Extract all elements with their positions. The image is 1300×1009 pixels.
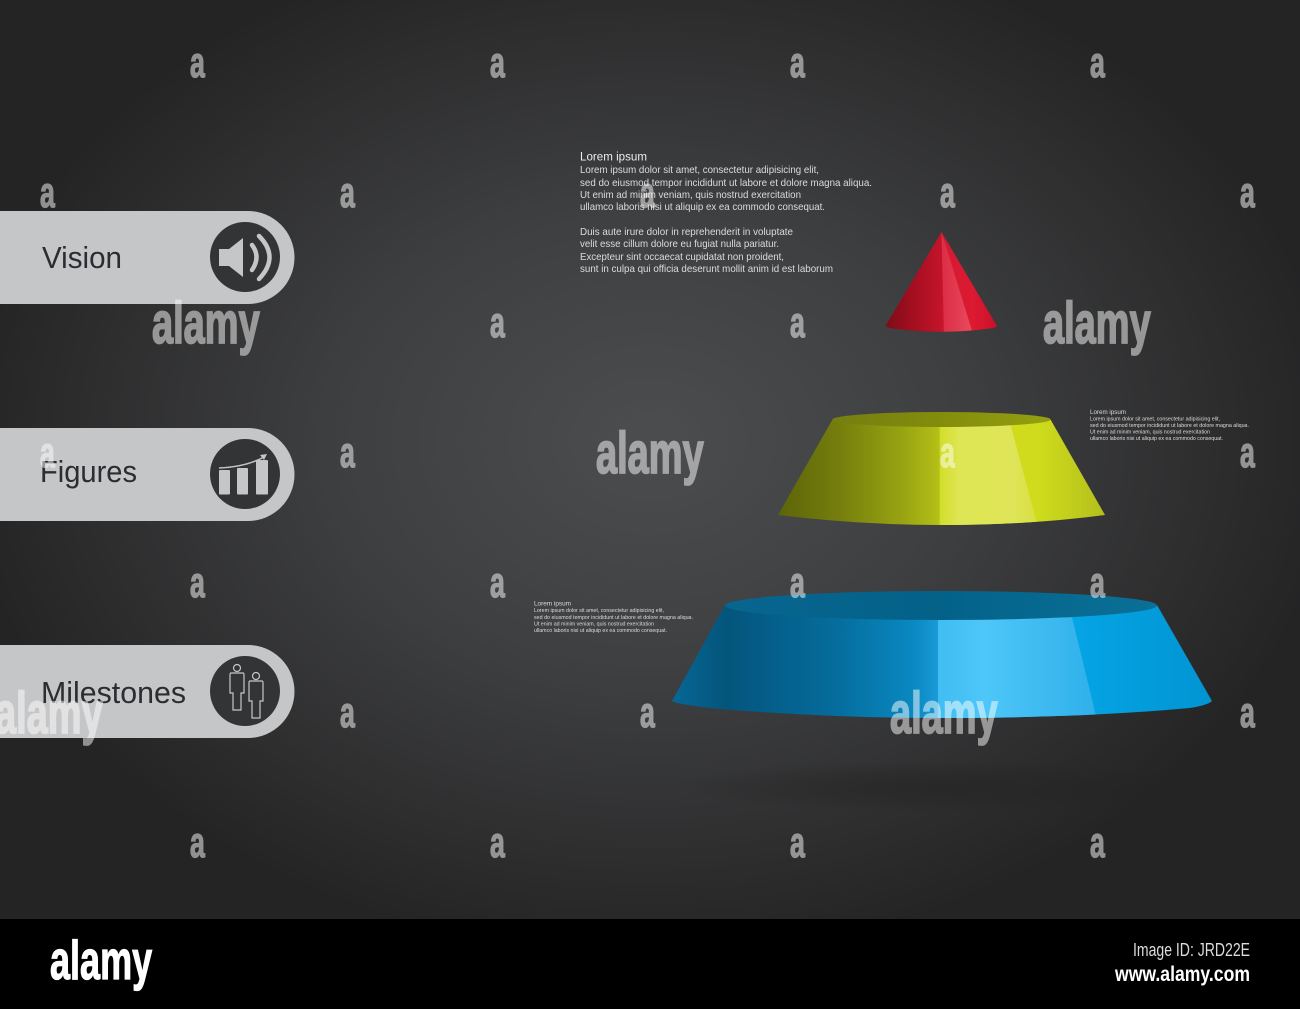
watermarks: a xyxy=(190,819,206,867)
text block: blue tier description: sed do eiusmod tempor incididunt ut labore et dolore magna aliqua. xyxy=(534,615,693,621)
text block: blue tier description: Ut enim ad minim veniam, quis nostrud exercitation xyxy=(534,622,654,628)
icon: two people xyxy=(210,656,280,726)
blue top opening xyxy=(725,591,1157,620)
watermarks: a xyxy=(1090,819,1106,867)
text block: main description: sed do eiusmod tempor incididunt ut labore et dolore magna aliqua. xyxy=(580,177,872,189)
footer logo: alamy xyxy=(50,929,152,991)
watermarks: a xyxy=(640,169,656,217)
text block: main description xyxy=(580,152,872,275)
watermarks: alamy xyxy=(890,682,998,746)
icon: growth chart xyxy=(210,439,280,509)
panel: Figures label xyxy=(0,428,294,521)
text block: main description: Duis aute irure dolor in reprehenderit in voluptate xyxy=(580,226,793,238)
text block: yellow tier description: ullamco laboris nisi ut aliquip ex ea commodo consequat. xyxy=(1090,436,1223,442)
text block: main description: Ut enim ad minim veniam, quis nostrud exercitation xyxy=(580,189,801,201)
watermarks: a xyxy=(40,169,56,217)
watermarks: a xyxy=(490,819,506,867)
watermarks: a xyxy=(1240,689,1256,737)
pyramid tier: blue frustum xyxy=(672,591,1212,720)
website url: www.alamy.com xyxy=(1114,963,1250,986)
text block: yellow tier description xyxy=(1090,409,1249,442)
watermarks: a xyxy=(1090,559,1106,607)
watermarks: a xyxy=(790,39,806,87)
text block: main description: ullamco laboris nisi ut aliquip ex ea commodo consequat. xyxy=(580,201,825,213)
watermarks: a xyxy=(340,689,356,737)
image id: Image ID: JRD22E xyxy=(1133,940,1250,960)
footer bar xyxy=(0,919,1300,1009)
text block: main description: Excepteur sint occaecat cupidatat non proident, xyxy=(580,251,784,263)
watermarks: a xyxy=(1240,169,1256,217)
watermarks: a xyxy=(40,429,56,477)
text block: yellow tier description: Ut enim ad minim veniam, quis nostrud exercitation xyxy=(1090,430,1210,436)
text block: main description: sunt in culpa qui officia deserunt mollit anim id est laborum xyxy=(580,263,833,275)
text block: main description: velit esse cillum dolore eu fugiat nulla pariatur. xyxy=(580,238,779,250)
watermarks: a xyxy=(790,299,806,347)
text block: blue tier description xyxy=(534,600,693,634)
watermarks: alamy xyxy=(152,292,260,356)
watermarks: a xyxy=(790,819,806,867)
text block: yellow tier description: Lorem ipsum dolor sit amet, consectetur adipisicing elit, xyxy=(1090,416,1220,422)
icon: speaker xyxy=(210,222,280,292)
watermarks: a xyxy=(640,689,656,737)
watermarks: a xyxy=(190,559,206,607)
text block: yellow tier description: sed do eiusmod tempor incididunt ut labore et dolore magna aliqua. xyxy=(1090,423,1249,429)
watermarks: alamy xyxy=(1043,292,1151,356)
label text: Vision: Vision xyxy=(42,240,122,275)
pyramid tier: yellow frustum xyxy=(778,412,1105,527)
watermarks: a xyxy=(490,559,506,607)
watermarks: a xyxy=(340,429,356,477)
panel: Vision label xyxy=(0,211,294,304)
watermarks: alamy xyxy=(596,422,704,486)
panel: Milestones label xyxy=(0,645,294,738)
text block: main description: Lorem ipsum dolor sit amet, consectetur adipisicing elit, xyxy=(580,164,819,176)
watermarks: a xyxy=(790,559,806,607)
pyramid tier: red cone xyxy=(886,232,997,334)
watermarks: a xyxy=(490,39,506,87)
text block: blue tier description: Lorem ipsum xyxy=(534,600,571,608)
watermarks: a xyxy=(1240,429,1256,477)
watermarks: a xyxy=(1090,39,1106,87)
text block: blue tier description: Lorem ipsum dolor sit amet, consectetur adipisicing elit, xyxy=(534,608,664,614)
text block: yellow tier description: Lorem ipsum xyxy=(1090,409,1126,416)
text block: blue tier description: ullamco laboris nisi ut aliquip ex ea commodo consequat. xyxy=(534,628,667,634)
label text: Figures: Figures xyxy=(40,454,137,489)
watermarks: a xyxy=(490,299,506,347)
watermarks: a xyxy=(190,39,206,87)
watermarks: a xyxy=(940,169,956,217)
watermarks: a xyxy=(340,169,356,217)
yellow top opening xyxy=(832,412,1050,427)
watermarks xyxy=(0,39,1256,867)
text block: main description: Lorem ipsum xyxy=(580,152,647,164)
label text: Milestones: Milestones xyxy=(41,675,186,710)
floor shadow xyxy=(675,761,1215,813)
watermarks: a xyxy=(940,429,956,477)
